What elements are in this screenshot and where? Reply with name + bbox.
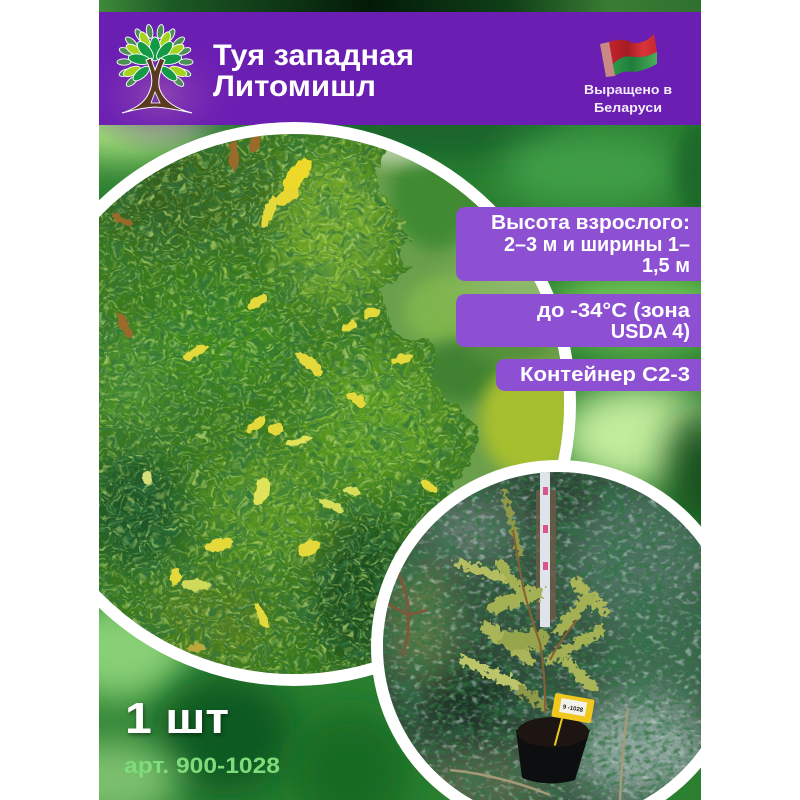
text: grown in Belarus: Выращено в: [584, 82, 672, 97]
panel: frost hardiness spec: USDA 4): [611, 321, 690, 343]
tree crown leaves: [117, 24, 193, 88]
title: Литомишл: [213, 70, 376, 103]
pine branches: [388, 572, 428, 655]
yellow plant tag: 9 -1028: [562, 704, 584, 714]
inset photo: potted seedling circle: [371, 460, 701, 800]
panel: height spec: 2–3 м и ширины 1–: [504, 234, 690, 256]
black plant pot: [516, 717, 590, 784]
article number: арт. 900-1028: [124, 753, 280, 778]
inset texture: blue needles: [371, 460, 711, 800]
inset texture: clumps: [383, 479, 701, 800]
quantity label: 1 шт: [125, 694, 229, 743]
text: grown in Belarus: [584, 82, 672, 115]
brown dry tips: [110, 130, 264, 340]
photo backdrop: blurred nursery: [99, 134, 564, 674]
panel: height spec: [456, 207, 701, 281]
measuring stick: [536, 471, 556, 627]
title: [213, 39, 414, 103]
yellow variegated tips: [142, 154, 439, 653]
foreground spruce branches: [450, 708, 628, 800]
tree trunk: [122, 58, 192, 113]
icon: Belarus flag: [600, 34, 657, 77]
text: grown in Belarus: Беларуси: [594, 100, 662, 115]
seedling fronds: [458, 490, 603, 713]
inset photo backdrop: spruce and pine: [383, 472, 701, 800]
main photo: thuja foliage circle: [99, 122, 576, 686]
logo: tree: [117, 24, 193, 113]
panel: height spec: Высота взрослого:: [491, 212, 690, 234]
title: Туя западная: [213, 39, 414, 72]
panel: container spec: Контейнер С2-3: [520, 364, 690, 386]
yellow plant tag: [552, 693, 594, 746]
panel: height spec: 1,5 м: [642, 255, 690, 277]
inset texture: dark needles: [371, 460, 711, 800]
thuja plant mass: [99, 134, 479, 674]
infographic canvas: [99, 0, 701, 800]
header top strip: [99, 0, 701, 12]
panel: frost hardiness spec: [456, 294, 701, 347]
panel: container spec: [496, 359, 701, 391]
panel: frost hardiness spec: до -34°C (зона: [537, 300, 691, 322]
background: blurred green backdrop: [99, 125, 701, 800]
header band: [75, 12, 701, 155]
